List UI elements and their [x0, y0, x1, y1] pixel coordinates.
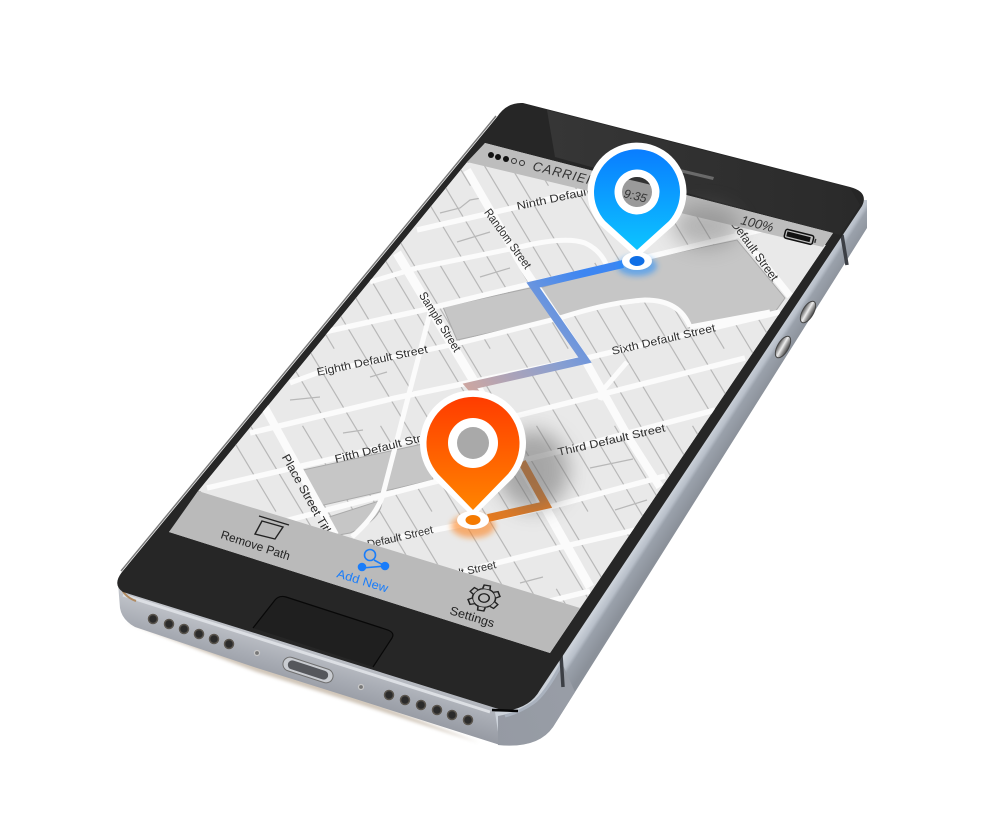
streets	[207, 170, 815, 601]
carrier label: CARRIER	[531, 158, 598, 189]
screws	[254, 650, 364, 690]
remove path tab: Remove Path	[219, 528, 292, 563]
battery percent: 100%	[739, 212, 775, 235]
street labels: Eighth Default Street	[316, 344, 429, 379]
phone metal body	[118, 116, 867, 746]
street labels: Third Default Street	[557, 422, 667, 459]
blue location pin	[588, 143, 686, 276]
secondary block lines	[290, 198, 647, 584]
battery icon	[784, 229, 817, 245]
street labels: Sixth Default Street	[611, 322, 717, 358]
pin body	[420, 390, 526, 517]
charging port	[281, 655, 335, 685]
speaker holes left	[148, 614, 234, 648]
face corner edge	[492, 710, 518, 711]
icon: bin	[255, 516, 289, 539]
pin ring	[614, 170, 660, 214]
side buttons	[772, 299, 819, 360]
street labels: Ninth Default Street	[516, 178, 628, 213]
street labels: Sample Street	[416, 289, 464, 355]
face reflection	[547, 110, 860, 235]
earpiece speaker	[679, 169, 714, 180]
street labels: Default Street	[728, 218, 782, 284]
street labels: Random Street	[481, 206, 535, 272]
map	[198, 162, 826, 604]
street labels: Default Street	[429, 559, 497, 586]
signal dots	[488, 152, 524, 166]
pin base	[622, 252, 652, 270]
blue pin shadow	[672, 204, 740, 248]
ground shadow	[125, 622, 480, 743]
orange pin shadow	[497, 430, 569, 510]
speaker holes right	[384, 690, 472, 724]
pin glow	[617, 256, 657, 276]
ring window	[457, 427, 489, 459]
icon: path nodes	[358, 550, 388, 570]
pin ring	[448, 418, 498, 468]
pin base	[457, 511, 489, 529]
street labels: Fifth Default Street	[334, 429, 439, 466]
settings tab: Settings	[448, 603, 496, 630]
block grid	[236, 166, 767, 604]
street labels	[279, 178, 782, 586]
phone illustration	[117, 103, 867, 746]
orange location pin	[420, 390, 526, 538]
add new tab	[335, 550, 390, 595]
gray blocks	[303, 240, 785, 536]
ring window: 9:35	[622, 186, 649, 206]
pin body	[588, 143, 686, 258]
status bar	[467, 143, 833, 247]
add new tab: Add New	[335, 566, 390, 595]
settings tab	[448, 583, 502, 630]
screen base	[169, 143, 833, 653]
bottom tab bar	[169, 491, 580, 653]
map background	[198, 162, 826, 608]
street labels: Default Street	[366, 524, 434, 551]
route	[470, 264, 623, 518]
phone front face	[117, 103, 864, 711]
icon: gear	[466, 583, 502, 613]
home button	[253, 596, 393, 667]
pin glow	[451, 514, 495, 538]
street labels: Place Street Title	[279, 452, 337, 542]
